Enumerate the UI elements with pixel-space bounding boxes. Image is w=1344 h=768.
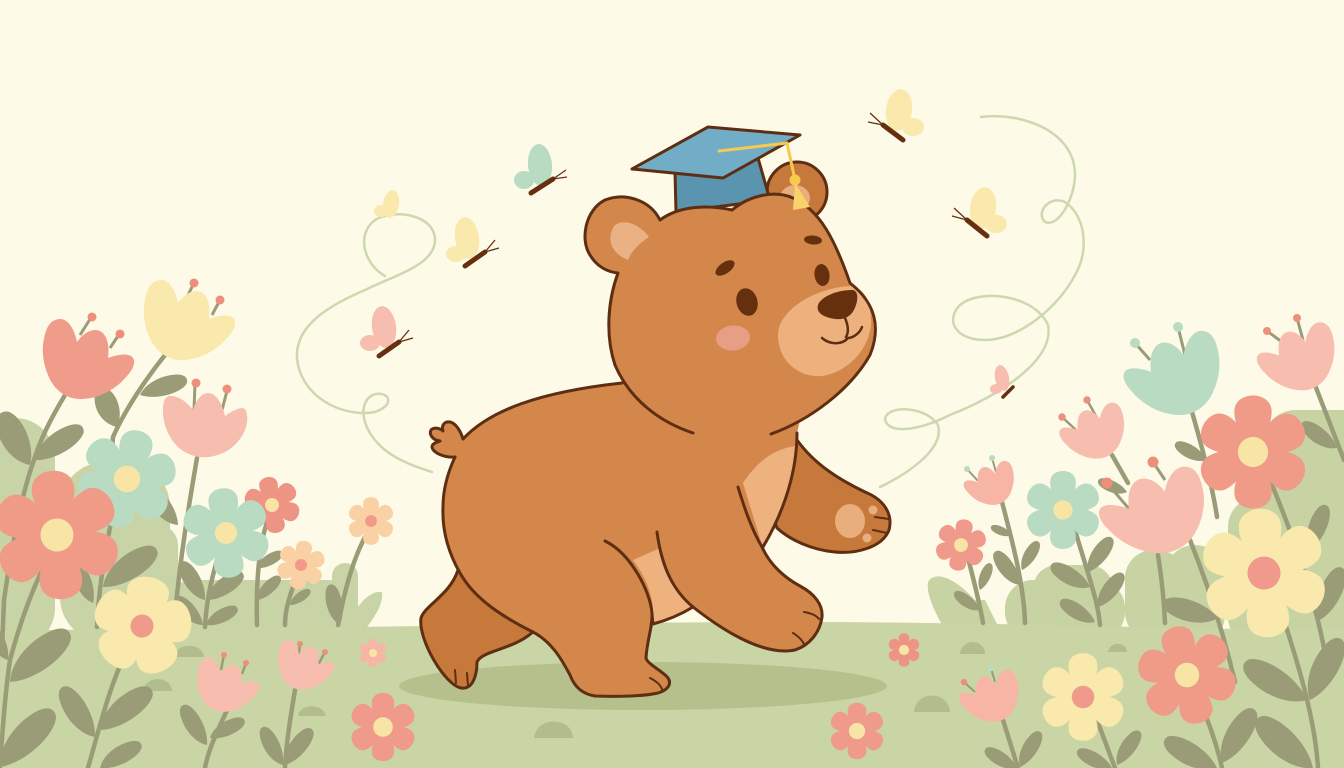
tulip: pink small right [964, 455, 1014, 505]
eyes and brows [713, 235, 831, 318]
ground stones [143, 642, 1127, 738]
flower: coral tiny center [887, 633, 921, 667]
flower: coral small left [238, 472, 306, 538]
flower: yellow front right [1038, 653, 1128, 741]
right bushes [928, 410, 1344, 647]
bear left ear [585, 197, 660, 273]
bear back leg [421, 570, 535, 688]
flower: coral center bottom [828, 703, 886, 759]
muzzle [778, 286, 871, 376]
tulip: coral left [43, 312, 134, 399]
left stems and leaves [0, 355, 366, 768]
left leaves [0, 371, 346, 768]
swirl: right flight path [880, 116, 1084, 487]
head outline [585, 194, 875, 434]
bear back arm [760, 440, 890, 552]
butterfly: yellow top right [868, 87, 924, 140]
butterfly: yellow near bear [446, 216, 499, 266]
bear ground shadow [399, 662, 887, 710]
flower: mint left [65, 418, 189, 540]
flower: peach far [346, 497, 396, 545]
flower: coral front left [348, 693, 418, 761]
flower: tiny pink [358, 639, 388, 667]
ground [0, 622, 1344, 768]
tulip: big pink right [1099, 456, 1204, 553]
swirl: left flight path [297, 214, 435, 472]
right stems [968, 385, 1344, 768]
tulip: pink small front left [197, 652, 259, 712]
flower: mint small left [176, 484, 276, 582]
flower: yellow left [80, 568, 203, 687]
tassel [719, 143, 810, 210]
tulip: pink left [163, 378, 247, 457]
flower: peach [272, 537, 330, 593]
bear right ear [767, 162, 827, 222]
ear inner [610, 222, 649, 260]
left bushes [0, 418, 382, 648]
tulip: mint right [1124, 322, 1219, 415]
cheek [715, 324, 751, 352]
flower: coral small right [930, 515, 992, 575]
butterfly: pink small right [990, 364, 1013, 397]
nose [818, 290, 857, 319]
tulip: pink mid right [1058, 396, 1124, 459]
tulip: pink front right [959, 665, 1018, 722]
tulip: yellow left [144, 278, 235, 360]
flower: mint right [1023, 471, 1103, 549]
tulip: pink top right [1257, 314, 1334, 390]
butterfly: pink left [360, 305, 413, 356]
flower: coral big right [1195, 395, 1311, 509]
butterfly: yellow right [952, 185, 1007, 236]
bear tail [430, 422, 463, 457]
right leaves [951, 416, 1344, 768]
flower: yellow big right [1192, 503, 1336, 643]
flower: coral big left [0, 465, 129, 605]
tulip: pink small front second [278, 640, 335, 690]
butterfly: pale yellow small [374, 189, 401, 219]
butterfly: mint top [514, 143, 567, 193]
flower: coral front right [1125, 614, 1249, 736]
mouth [822, 318, 862, 343]
bear [421, 127, 890, 697]
bear body [442, 383, 822, 697]
graduation cap top [632, 127, 800, 178]
bear head [585, 194, 875, 434]
cap base [675, 158, 770, 212]
